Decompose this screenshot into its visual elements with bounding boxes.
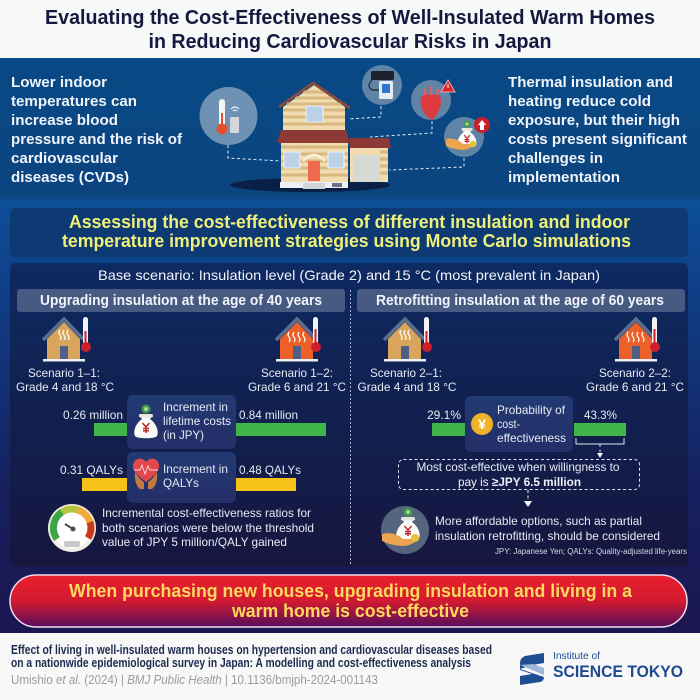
bar chart: probability: 29.1% [427, 408, 461, 422]
intro text left: increase blood [11, 112, 118, 129]
footnote: JPY: Japanese Yen; QALYs: Quality-adjusted life-years [495, 547, 687, 556]
citation: Umishio et al. (2024) | BMJ Public Health | 10.1136/bmjph-2024-001143 [11, 673, 378, 687]
icon: heart with warning [411, 80, 455, 120]
callout: willingness to pay: pay is ≥JPY 6.5 million [458, 475, 581, 489]
icon: money bag with up arrow [444, 117, 490, 157]
conclusion banner: warm home is cost-effective [231, 601, 469, 621]
intro text right: costs present significant [508, 131, 687, 148]
citation [11, 643, 492, 687]
bar chart: lifetime costs: 0.84 million [239, 408, 298, 422]
heading: retrofitting insulation [357, 289, 685, 312]
intro text left: diseases (CVDs) [11, 169, 129, 186]
panel: upgrading at 40 [16, 289, 346, 552]
scenario 2-2 [586, 317, 684, 394]
callout: probability of cost-effectiveness: Probability of [497, 403, 566, 417]
scenario 1-2: Scenario 1–2: [261, 366, 333, 380]
text: affordable options [435, 514, 660, 543]
bar chart: lifetime costs [63, 408, 326, 436]
callout: probability of cost-effectiveness [465, 396, 573, 452]
scenario 1-2 [248, 317, 346, 394]
callout: willingness to pay [398, 460, 640, 490]
scenario 1-2: Grade 6 and 21 °C [248, 380, 346, 394]
callout: probability of cost-effectiveness: cost- [497, 417, 520, 431]
scenario 2-1: Grade 4 and 18 °C [358, 380, 457, 394]
callout: lifetime costs: Increment in [163, 400, 228, 414]
callout: lifetime costs [127, 395, 236, 449]
icon: affordable options [381, 506, 429, 554]
title band: in Reducing Cardiovascular Risks in Japan [148, 31, 552, 53]
dashed connectors [228, 106, 464, 170]
text: incremental cost-effectiveness: value of JPY 5 million/QALY gained [102, 535, 287, 549]
callout: QALYs: QALYs [163, 476, 199, 490]
conclusion banner: When purchasing new houses, upgrading insulation and living in a [69, 581, 633, 601]
bar chart: QALYs: 0.31 QALYs [60, 463, 123, 477]
arrow: bracket to callout [576, 438, 624, 458]
callout: lifetime costs: (in JPY) [163, 428, 204, 442]
house illustration [230, 83, 391, 192]
callout: probability of cost-effectiveness: ¥ [478, 416, 486, 432]
panel: retrofitting at 60 [357, 289, 687, 556]
scenario 1-1: Scenario 1–1: [28, 366, 100, 380]
heading band: assessment [10, 208, 688, 257]
heading: retrofitting insulation: Retrofitting insulation at the age of 60 years [376, 292, 664, 309]
icon: gauge [48, 504, 96, 552]
text: affordable options: More affordable options, such as partial [435, 514, 642, 528]
conclusion banner [10, 575, 687, 627]
callout: lifetime costs: lifetime costs [163, 414, 231, 428]
heading: upgrading insulation: Upgrading insulation at the age of 40 years [40, 292, 322, 309]
heading: upgrading insulation [17, 289, 345, 312]
scenario 1-1 [16, 317, 114, 394]
scenario 2-2: Scenario 2–2: [599, 366, 671, 380]
callout: QALYs: Increment in [163, 462, 228, 476]
panel: scenarios background [10, 263, 688, 567]
text: affordable options: insulation retrofitting, should be considered [435, 529, 660, 543]
logo [520, 651, 683, 685]
title band: Evaluating the Cost-Effectiveness of Well-Insulated Warm Homes [45, 7, 655, 29]
text: incremental cost-effectiveness [102, 506, 314, 549]
icon: thermometer and sensor [200, 87, 258, 145]
intro text right: exposure, but their high [508, 112, 680, 129]
base scenario text: Base scenario: Insulation level (Grade 2) and 15 °C (most prevalent in Japan) [98, 267, 600, 283]
heading band: assessment: Assessing the cost-effectiveness of different insulation and indoor [69, 212, 630, 232]
intro text left [11, 74, 183, 186]
intro text left: pressure and the risk of [11, 131, 183, 148]
bar chart: probability: 43.3% [584, 408, 617, 422]
text: incremental cost-effectiveness: both scenarios were below the threshold [102, 521, 314, 535]
bar chart: probability [427, 408, 626, 436]
intro text left: cardiovascular [11, 150, 118, 167]
scenario 2-2: Grade 6 and 21 °C [586, 380, 684, 394]
heading band: assessment: temperature improvement strategies using Monte Carlo simulations [62, 231, 631, 251]
logo: SCIENCE TOKYO [553, 663, 683, 681]
divider [350, 290, 352, 566]
bar chart: lifetime costs: 0.26 million [63, 408, 123, 422]
icon: blood pressure monitor [362, 65, 402, 105]
arrow: willingness to options [524, 490, 532, 507]
logo: Institute of [553, 651, 600, 662]
intro text right: Thermal insulation and [508, 74, 673, 91]
text: incremental cost-effectiveness: Incremental cost-effectiveness ratios for [102, 506, 311, 520]
footer [0, 633, 700, 700]
intro text right: implementation [508, 169, 620, 186]
bar chart: QALYs [60, 463, 301, 491]
scenario 1-1: Grade 4 and 18 °C [16, 380, 114, 394]
scenario 2-1 [358, 317, 457, 394]
intro text left: Lower indoor [11, 74, 107, 91]
title band [0, 0, 700, 58]
callout: probability of cost-effectiveness: effectiveness [497, 431, 566, 445]
intro text right: heating reduce cold [508, 93, 651, 110]
citation: Effect of living in well-insulated warm houses on hypertension and cardiovascular diseases based [11, 643, 492, 657]
bar chart: QALYs: 0.48 QALYs [239, 463, 301, 477]
callout: QALYs [127, 452, 236, 503]
callout: willingness to pay: Most cost-effective when willingness to [416, 460, 620, 474]
scenario 2-1: Scenario 2–1: [370, 366, 442, 380]
intro text right: challenges in [508, 150, 603, 167]
citation: on a nationwide epidemiological survey in Japan: A modelling and cost-effectiveness analysis [11, 656, 471, 670]
intro text left: temperatures can [11, 93, 137, 110]
intro text right [508, 74, 687, 186]
